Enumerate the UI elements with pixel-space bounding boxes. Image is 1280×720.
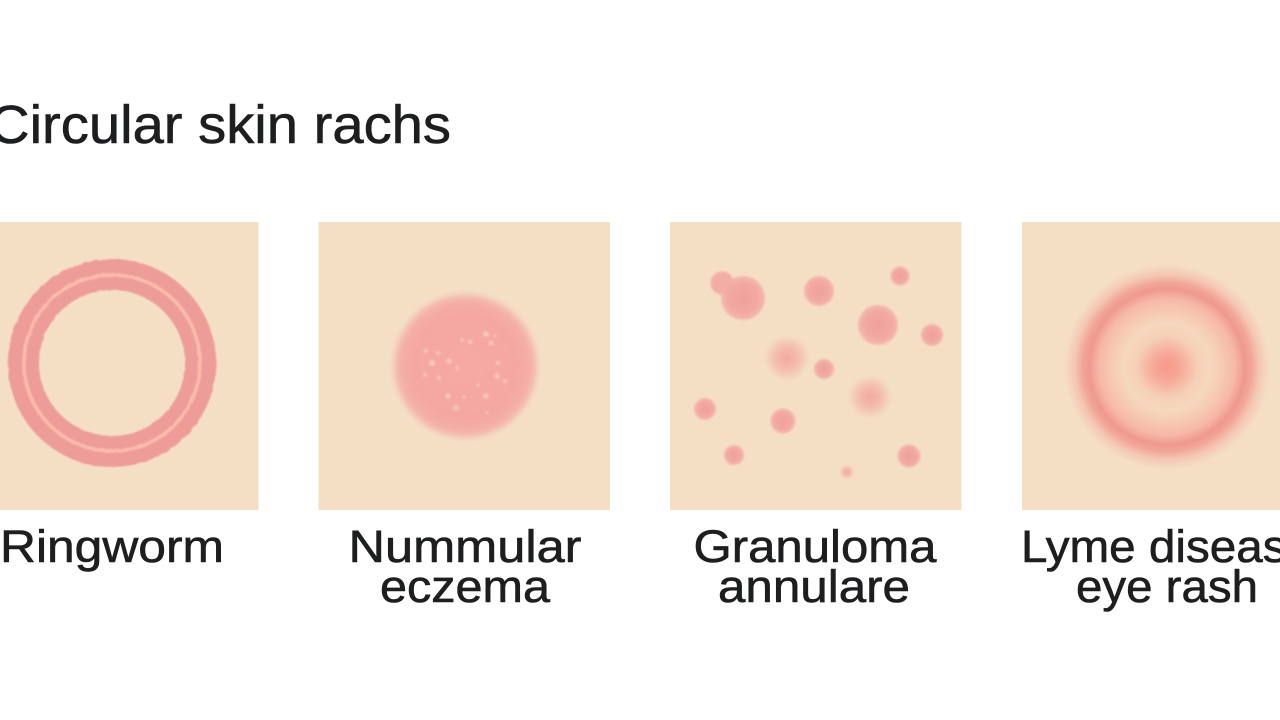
title: Circular skin rachs	[0, 95, 451, 155]
label: granuloma annulare	[694, 521, 938, 612]
panel: granuloma annulare	[670, 222, 962, 510]
icon: bullseye rash	[1064, 264, 1270, 470]
icon: nummular eczema patch	[394, 294, 538, 438]
label: nummular eczema	[348, 521, 582, 612]
icon: ringworm ring	[24, 274, 200, 452]
label: granuloma annulare: Granuloma	[694, 521, 938, 572]
panel: nummular eczema	[318, 222, 610, 510]
label: ringworm: Ringworm	[0, 521, 224, 572]
label: nummular eczema: Nummular	[348, 521, 582, 572]
panel: ringworm	[0, 222, 258, 510]
label: granuloma annulare: annulare	[718, 561, 910, 612]
label: lyme disease eye rash: eye rash	[1076, 561, 1258, 612]
label: lyme disease eye rash	[1021, 521, 1280, 612]
panel: lyme disease	[1022, 222, 1280, 510]
icon: granuloma annulare spots	[694, 266, 943, 479]
label: nummular eczema: eczema	[380, 561, 551, 612]
